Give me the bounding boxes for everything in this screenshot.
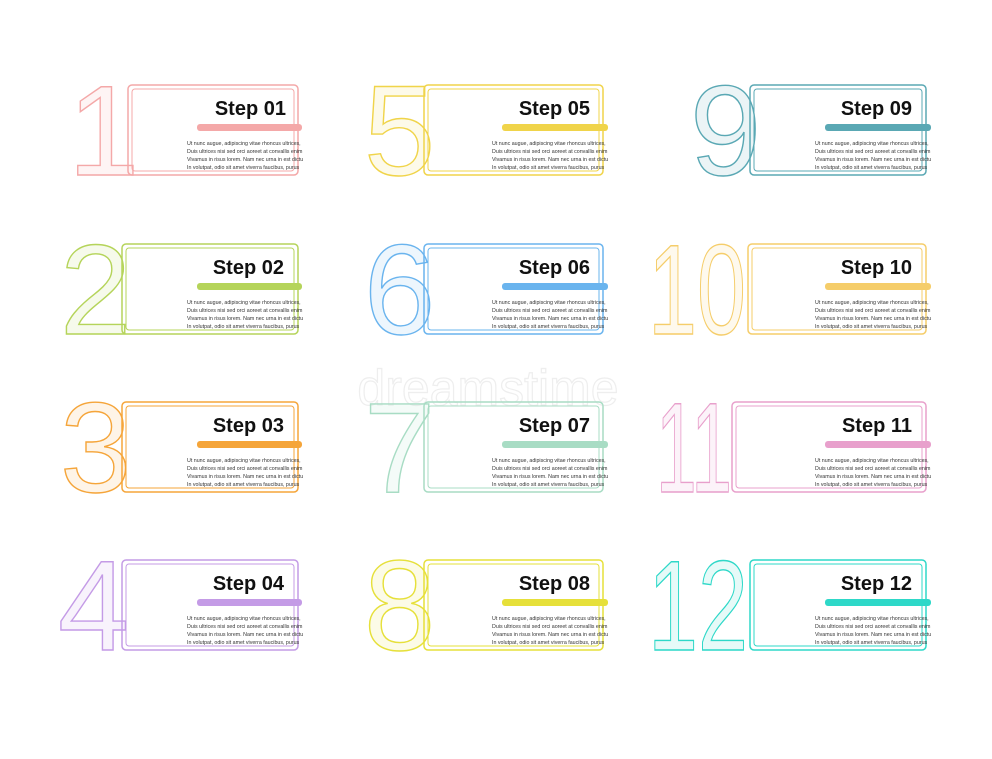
body text: Duis ultrices nisi sed orci aoreet at convallis enim — [815, 624, 931, 630]
body text: Duis ultrices nisi sed orci aoreet at convallis enim — [187, 149, 303, 155]
body text: Duis ultrices nisi sed orci aoreet at convallis enim — [815, 308, 931, 314]
title: Step 01 — [215, 98, 286, 120]
body text: Duis ultrices nisi sed orci aoreet at convallis enim — [492, 624, 608, 630]
card: step 10 — [648, 219, 931, 362]
number 4: 4 — [58, 535, 129, 678]
body text: Vivamus in risus lorem. Nam nec urna in est dictu — [187, 632, 303, 638]
title: Step 04 — [213, 573, 285, 595]
body text: In volutpat, odio sit amet viverra faucibus, purus — [187, 165, 300, 171]
body text: Vivamus in risus lorem. Nam nec urna in est dictu — [815, 474, 931, 480]
body text: Ut nunc augue, adipiscing vitae rhoncus ultrices, — [492, 458, 606, 464]
body text: Vivamus in risus lorem. Nam nec urna in est dictu — [492, 474, 608, 480]
number 12: 12 — [648, 535, 748, 678]
card: step 04 — [58, 535, 303, 678]
body text: In volutpat, odio sit amet viverra faucibus, purus — [815, 482, 928, 488]
body text: Ut nunc augue, adipiscing vitae rhoncus ultrices, — [815, 300, 929, 306]
title: Step 05 — [519, 98, 590, 120]
body text: In volutpat, odio sit amet viverra faucibus, purus — [492, 324, 605, 330]
body text: Vivamus in risus lorem. Nam nec urna in est dictu — [815, 632, 931, 638]
number 11: 11 — [656, 377, 732, 520]
title: Step 12 — [841, 573, 912, 595]
body text: Duis ultrices nisi sed orci aoreet at convallis enim — [187, 466, 303, 472]
title: Step 03 — [213, 415, 284, 437]
card: step 01 — [68, 60, 303, 203]
body text: Vivamus in risus lorem. Nam nec urna in est dictu — [815, 157, 931, 163]
body text: Vivamus in risus lorem. Nam nec urna in est dictu — [492, 157, 608, 163]
body text: In volutpat, odio sit amet viverra faucibus, purus — [187, 482, 300, 488]
body text: Ut nunc augue, adipiscing vitae rhoncus ultrices, — [815, 616, 929, 622]
title: Step 02 — [213, 257, 284, 279]
card: step 08 — [364, 535, 608, 678]
body text: Ut nunc augue, adipiscing vitae rhoncus ultrices, — [815, 141, 929, 147]
body text: In volutpat, odio sit amet viverra faucibus, purus — [187, 640, 300, 646]
number 2: 2 — [60, 219, 131, 362]
body text: Vivamus in risus lorem. Nam nec urna in est dictu — [187, 157, 303, 163]
body text: Ut nunc augue, adipiscing vitae rhoncus ultrices, — [492, 300, 606, 306]
body text: In volutpat, odio sit amet viverra faucibus, purus — [815, 640, 928, 646]
body text: In volutpat, odio sit amet viverra faucibus, purus — [815, 324, 928, 330]
number 9: 9 — [690, 60, 761, 203]
body text: In volutpat, odio sit amet viverra faucibus, purus — [492, 482, 605, 488]
card: step 05 — [364, 60, 608, 203]
body text: Vivamus in risus lorem. Nam nec urna in est dictu — [492, 316, 608, 322]
body text: Duis ultrices nisi sed orci aoreet at convallis enim — [187, 308, 303, 314]
title: Step 07 — [519, 415, 590, 437]
body text: In volutpat, odio sit amet viverra faucibus, purus — [815, 165, 928, 171]
number 6: 6 — [364, 219, 435, 362]
body text: Vivamus in risus lorem. Nam nec urna in est dictu — [187, 316, 303, 322]
body text: In volutpat, odio sit amet viverra faucibus, purus — [492, 165, 605, 171]
body text: Vivamus in risus lorem. Nam nec urna in est dictu — [815, 316, 931, 322]
body text: In volutpat, odio sit amet viverra faucibus, purus — [492, 640, 605, 646]
number 1: 1 — [68, 60, 139, 203]
title: Step 08 — [519, 573, 590, 595]
title: Step 11 — [842, 415, 912, 437]
card: step 09 — [690, 60, 931, 203]
body text: Duis ultrices nisi sed orci aoreet at convallis enim — [815, 149, 931, 155]
body text: Ut nunc augue, adipiscing vitae rhoncus ultrices, — [187, 616, 301, 622]
body text: Duis ultrices nisi sed orci aoreet at convallis enim — [492, 308, 608, 314]
card: step 11 — [656, 377, 931, 520]
title: Step 06 — [519, 257, 590, 279]
card: step 12 — [648, 535, 931, 678]
body text: Ut nunc augue, adipiscing vitae rhoncus ultrices, — [187, 300, 301, 306]
body text: Duis ultrices nisi sed orci aoreet at convallis enim — [187, 624, 303, 630]
number 3: 3 — [60, 377, 131, 520]
watermark: dreamstime — [357, 360, 619, 416]
number 10: 10 — [648, 219, 746, 362]
body text: Ut nunc augue, adipiscing vitae rhoncus ultrices, — [187, 458, 301, 464]
title: Step 09 — [841, 98, 912, 120]
card: step 03 — [60, 377, 303, 520]
body text: Ut nunc augue, adipiscing vitae rhoncus ultrices, — [492, 141, 606, 147]
body text: Ut nunc augue, adipiscing vitae rhoncus ultrices, — [187, 141, 301, 147]
body text: Vivamus in risus lorem. Nam nec urna in est dictu — [492, 632, 608, 638]
body text: Ut nunc augue, adipiscing vitae rhoncus ultrices, — [815, 458, 929, 464]
number 7: 7 — [364, 377, 435, 520]
body text: Duis ultrices nisi sed orci aoreet at convallis enim — [492, 466, 608, 472]
card: step 06 — [364, 219, 608, 362]
body text: Ut nunc augue, adipiscing vitae rhoncus ultrices, — [492, 616, 606, 622]
card: step 02 — [60, 219, 303, 362]
body text: In volutpat, odio sit amet viverra faucibus, purus — [187, 324, 300, 330]
body text: Duis ultrices nisi sed orci aoreet at convallis enim — [815, 466, 931, 472]
body text: Vivamus in risus lorem. Nam nec urna in est dictu — [187, 474, 303, 480]
number 5: 5 — [364, 60, 435, 203]
title: Step 10 — [841, 257, 912, 279]
body text: Duis ultrices nisi sed orci aoreet at convallis enim — [492, 149, 608, 155]
number 8: 8 — [364, 535, 435, 678]
card: step 07 — [364, 377, 608, 520]
